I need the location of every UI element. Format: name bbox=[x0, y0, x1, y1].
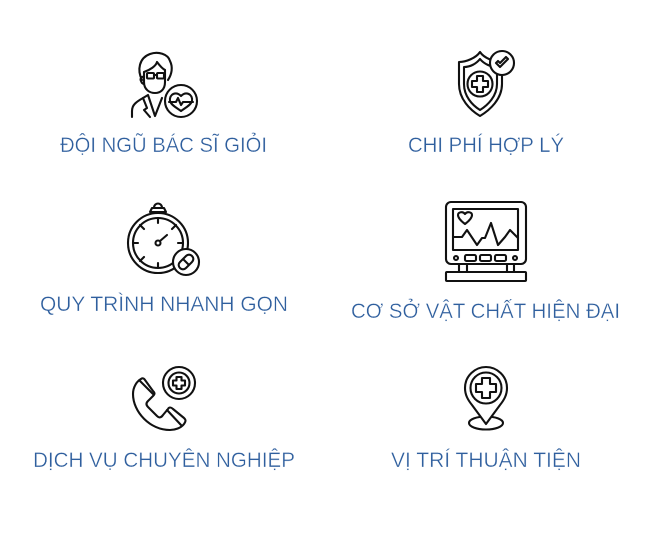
heading: location: VỊ TRÍ THUẬN TIỆN bbox=[391, 447, 581, 472]
icon: map pin with cross bbox=[465, 367, 507, 430]
panel: cost bbox=[408, 51, 564, 157]
heading: cost: CHI PHÍ HỢP LÝ bbox=[408, 132, 564, 157]
panel: facilities bbox=[351, 202, 620, 323]
heading: doctors: ĐỘI NGŨ BÁC SĨ GIỎI bbox=[60, 132, 267, 157]
heading: facilities: CƠ SỞ VẬT CHẤT HIỆN ĐẠI bbox=[351, 298, 620, 323]
panel: process bbox=[40, 204, 288, 316]
icon: phone with medical badge bbox=[133, 367, 195, 430]
panel: doctors bbox=[60, 53, 267, 157]
icon: heart monitor bbox=[446, 202, 526, 281]
panel: service bbox=[33, 367, 295, 472]
icon: stopwatch with pill badge bbox=[128, 204, 199, 275]
icon: doctor with heartbeat badge bbox=[132, 53, 197, 117]
heading: service: DỊCH VỤ CHUYÊN NGHIỆP bbox=[33, 447, 295, 472]
panel: location bbox=[391, 367, 581, 472]
heading: process: QUY TRÌNH NHANH GỌN bbox=[40, 291, 288, 316]
icon: shield with check badge bbox=[459, 51, 514, 116]
